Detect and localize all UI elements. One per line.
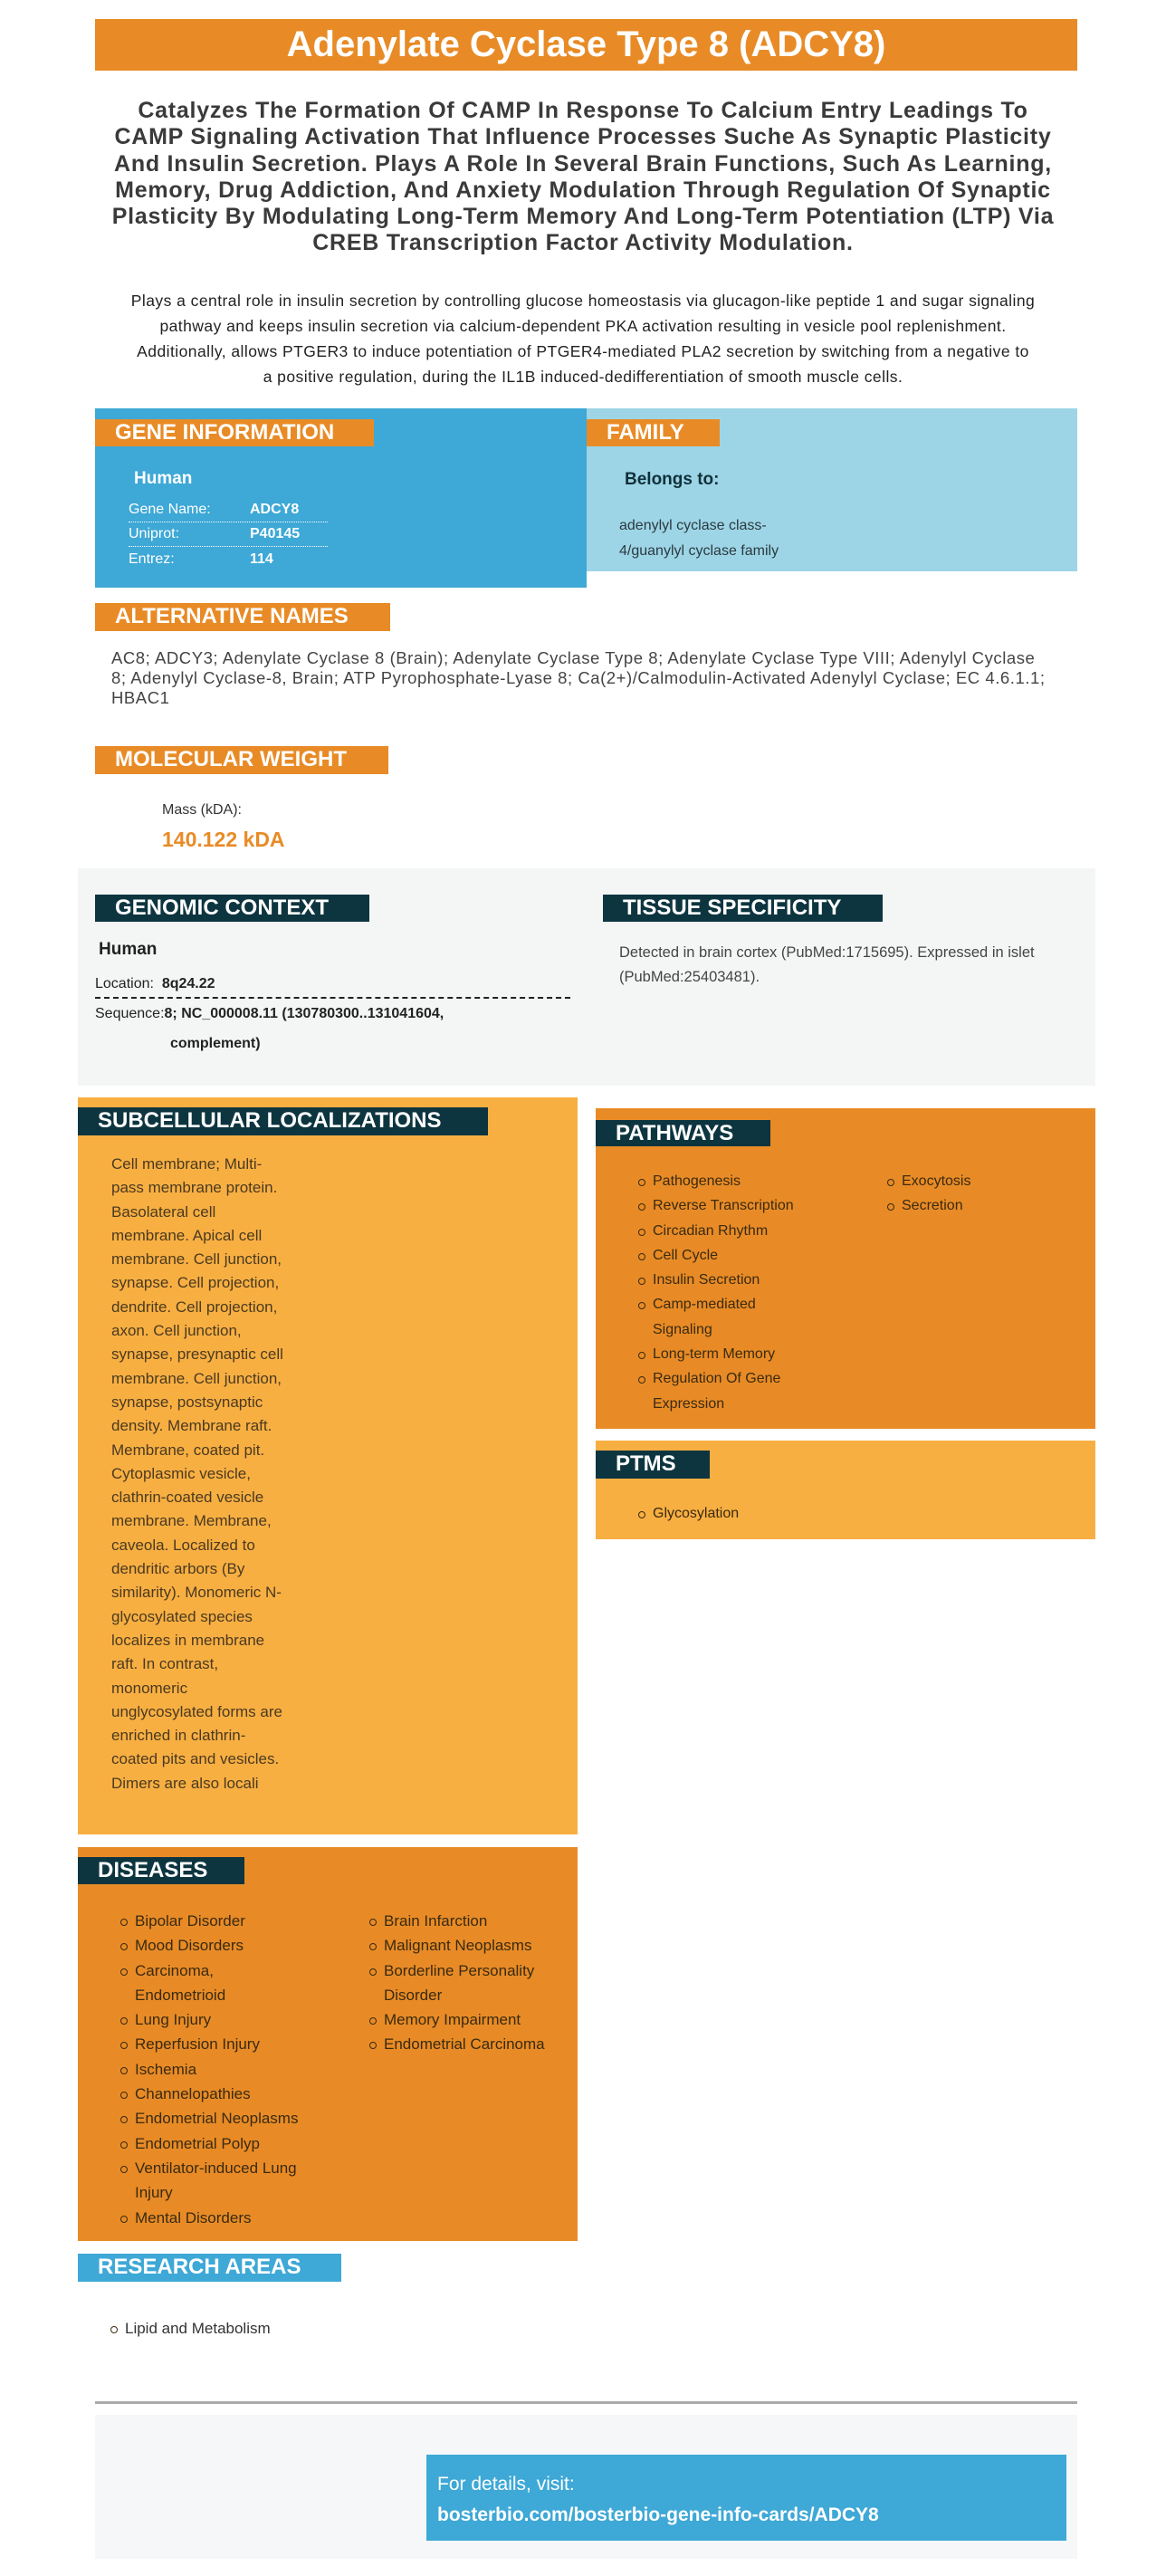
family text: adenylyl cyclase class-4/guanylyl cyclase family [619,518,779,559]
subcellular text: clathrin-coated vesicle [111,1489,263,1506]
diseases list col 1: Channelopathies [135,2085,251,2102]
diseases list col 2: Memory Impairment [384,2011,521,2028]
gene info table: P40145 [250,526,300,541]
mass value: 140.122 kDA [162,828,285,851]
gene info table: Human [134,469,192,488]
subcellular text: synapse, postsynaptic [111,1393,263,1411]
subcellular text: Cell membrane; Multi- [111,1155,262,1173]
heading: gene information: GENE INFORMATION [115,420,334,445]
ptms list: Glycosylation [653,1506,739,1521]
description paragraph: Plays a central role in insulin secretion by controlling glucose homeostasis via glucagon-like peptide 1 and sugar signaling [131,292,1035,310]
gene info table: Gene Name: [129,502,211,517]
pathways list col 2: Secretion [902,1198,963,1213]
research areas list: Lipid and Metabolism [125,2320,271,2337]
subcellular text: unglycosylated forms are [111,1703,282,1720]
subcellular text: caveola. Localized to [111,1537,255,1554]
pathways list col 1: Insulin Secretion [653,1272,760,1288]
diseases list col 1: Lung Injury [135,2011,211,2028]
pathways list col 1: Cell Cycle [653,1248,718,1263]
diseases list col 1: Bipolar Disorder [135,1912,245,1930]
heading: molecular weight: MOLECULAR WEIGHT [115,747,347,771]
title: Adenylate Cyclase Type 8 (ADCY8) [287,24,885,64]
subcellular text: membrane. Membrane, [111,1512,272,1529]
description paragraph: Additionally, allows PTGER3 to induce potentiation of PTGER4-mediated PLA2 secretion by switching from a negative to [137,342,1029,360]
heading: research areas: RESEARCH AREAS [98,2255,301,2279]
summary heading text: Catalyzes The Formation Of CAMP In Response To Calcium Entry Leadings To [138,98,1028,123]
subcellular text: pass membrane protein. [111,1179,277,1196]
gene info table [129,469,328,567]
diseases list col 2: Brain Infarction [384,1912,487,1930]
genomic info [95,940,570,1051]
diseases list col 2: Malignant Neoplasms [384,1937,531,1954]
subcellular text [111,1155,283,1792]
subcellular text: enriched in clathrin- [111,1727,245,1744]
alternative names text: 8; Adenylyl Cyclase-8, Brain; ATP Pyrophosphate-Lyase 8; Ca(2+)/Calmodulin-Activated Adenylyl Cyclase; EC 4.6.1.1; [111,668,1046,687]
gene info table: Uniprot: [129,526,179,541]
diseases list col 1: Endometrial Neoplasms [135,2110,298,2127]
callout: details link: bosterbio.com/bosterbio-gene-info-cards/ADCY8 [437,2504,879,2525]
heading: family [587,419,720,446]
genomic info: Location: 8q24.22 [95,976,215,991]
tissue text: Detected in brain cortex (PubMed:1715695). Expressed in islet (PubMed:25403481). [619,944,1035,985]
heading: ptms: PTMS [616,1451,676,1476]
summary heading text: And Insulin Secretion. Plays A Role In Several Brain Functions, Such As Learning, [114,151,1052,177]
summary heading text [112,98,1054,255]
pathways list col 2 [887,1173,970,1213]
heading: research areas [78,2254,341,2282]
description paragraph: a positive regulation, during the IL1B induced-dedifferentiation of smooth muscle cells. [263,368,903,386]
diseases list col 1: Carcinoma, Endometrioid [135,1962,225,2004]
diseases list col 1: Mood Disorders [135,1937,244,1954]
subcellular text: Cytoplasmic vesicle, [111,1465,251,1482]
genomic info: Human [99,940,157,959]
heading: pathways: PATHWAYS [616,1121,733,1145]
panel: gene information [95,408,587,588]
alternative names text: AC8; ADCY3; Adenylate Cyclase 8 (Brain); Adenylate Cyclase Type 8; Adenylate Cyclase Type VIII; Adenylyl Cyclase [111,648,1035,667]
heading: ptms [596,1451,710,1479]
heading: family: FAMILY [607,420,684,445]
subcellular text: synapse, presynaptic cell [111,1345,283,1363]
pathways list col 1: Reverse Transcription [653,1198,794,1213]
subcellular text: similarity). Monomeric N- [111,1584,282,1601]
heading: alternative names: ALTERNATIVE NAMES [115,604,349,628]
diseases list col 1 [120,1912,298,2226]
subcellular text: coated pits and vesicles. [111,1750,279,1767]
diseases list col 1: Mental Disorders [135,2209,252,2226]
subcellular text: monomeric [111,1680,187,1697]
callout: details link [426,2455,1066,2541]
gene info table: Entrez: [129,551,175,567]
subcellular text: density. Membrane raft. [111,1417,272,1434]
subcellular text: axon. Cell junction, [111,1322,242,1339]
pathways list col 1: Circadian Rhythm [653,1223,768,1239]
subcellular text: dendrite. Cell projection, [111,1298,277,1316]
diseases list col 1: Ischemia [135,2061,196,2078]
summary heading text: CREB Transcription Factor Activity Modulation. [312,230,854,255]
mass value: Mass (kDA): [162,802,242,818]
title [95,19,1077,71]
description paragraph: pathway and keeps insulin secretion via calcium-dependent PKA activation resulting in vesicle pool replenishment. [159,317,1007,335]
heading: pathways [596,1120,770,1146]
panel: ptms [596,1441,1095,1539]
subcellular text: glycosylated species [111,1608,253,1625]
diseases list col 2: Endometrial Carcinoma [384,2035,545,2053]
summary heading text: CAMP Signaling Activation That Influence Processes Suche As Synaptic Plasticity [114,124,1051,149]
alternative names text [111,648,1046,707]
subcellular text: membrane. Cell junction, [111,1250,282,1268]
belongs to label: Belongs to: [625,470,719,489]
panel: family [587,408,1077,571]
subcellular text: raft. In contrast, [111,1655,218,1672]
diseases list col 1: Endometrial Polyp [135,2135,260,2152]
subcellular text: localizes in membrane [111,1632,264,1649]
subcellular text: dendritic arbors (By [111,1560,244,1577]
footer panel [95,2415,1077,2559]
gene info table: ADCY8 [250,502,299,517]
diseases list col 2: Borderline Personality Disorder [384,1962,534,2004]
diseases list col 2 [369,1912,545,2053]
summary heading text: Memory, Drug Addiction, And Anxiety Modulation Through Regulation Of Synaptic [115,177,1051,203]
subcellular text: Membrane, coated pit. [111,1441,264,1459]
callout: details link: For details, visit: [437,2474,575,2495]
pathways list col 1: Long-term Memory [653,1346,775,1362]
diseases list col 1: Ventilator-induced Lung Injury [135,2159,297,2201]
pathways list col 1: Pathogenesis [653,1173,741,1189]
panel: diseases [78,1847,578,2241]
gene info table: 114 [250,551,273,567]
panel: subcellular localizations [78,1097,578,1834]
pathways list col 2: Exocytosis [902,1173,970,1189]
heading: alternative names [95,603,390,631]
heading: diseases [78,1857,244,1884]
subcellular text: Basolateral cell [111,1203,215,1221]
genomic info: Sequence:8; NC_000008.11 (130780300..131041604, complement) [95,1006,444,1051]
subcellular text: Dimers are also locali [111,1775,259,1792]
heading: genomic context: GENOMIC CONTEXT [115,895,329,920]
description paragraph [131,292,1035,386]
summary heading text: Plasticity By Modulating Long-Term Memory And Long-Term Potentiation (LTP) Via [112,204,1054,229]
panel: genomic context & tissue [78,868,1095,1086]
pathways list col 1 [638,1173,794,1412]
alternative names text: HBAC1 [111,688,169,707]
subcellular text: membrane. Apical cell [111,1227,262,1244]
heading: subcellular: SUBCELLULAR LOCALIZATIONS [98,1108,442,1133]
heading: tissue specificity: TISSUE SPECIFICITY [623,895,841,920]
heading: diseases: DISEASES [98,1858,207,1882]
heading: molecular weight [95,746,388,774]
pathways list col 1: Camp-mediated Signaling [653,1297,756,1337]
panel: pathways [596,1108,1095,1429]
subcellular text: membrane. Cell junction, [111,1370,282,1387]
diseases list col 1: Reperfusion Injury [135,2035,260,2053]
pathways list col 1: Regulation Of Gene Expression [653,1371,780,1412]
subcellular text: synapse. Cell projection, [111,1274,279,1291]
mass value [162,802,285,851]
